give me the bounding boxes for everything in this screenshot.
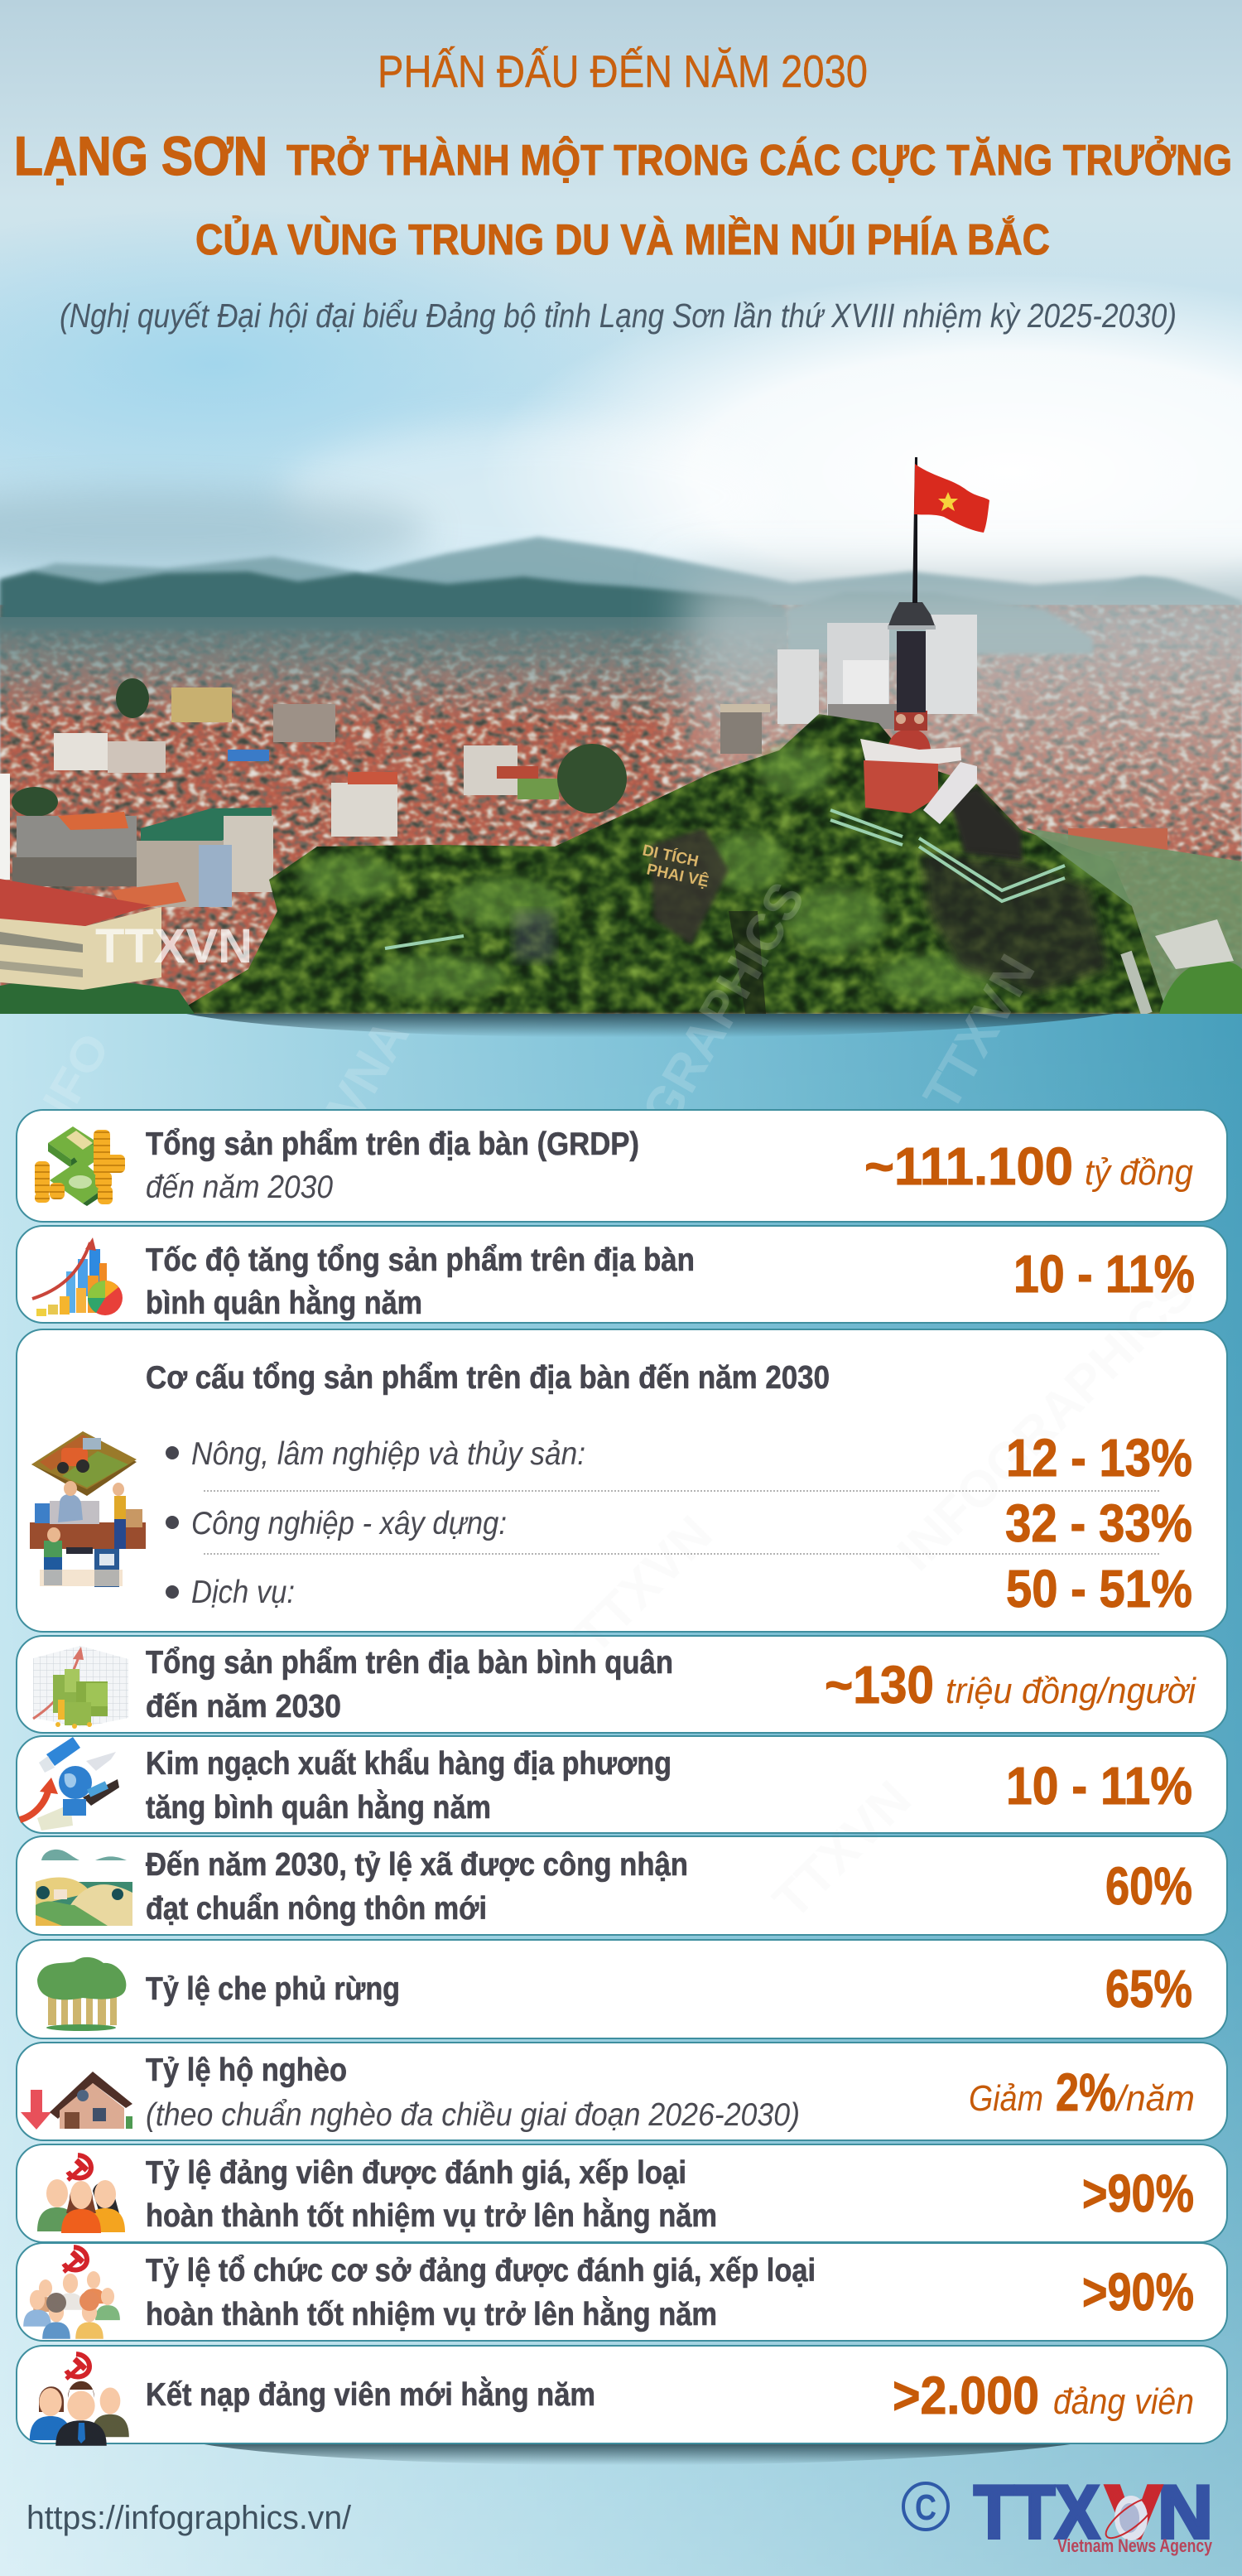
icon: meeting group [23, 2247, 120, 2339]
row: industry: 32 - 33% [1005, 1493, 1192, 1553]
wordmark: TTX [974, 2471, 1100, 2554]
title [14, 46, 1232, 335]
flag [914, 464, 989, 533]
label: (theo chuẩn nghèo đa chiều giai đoạn 2026-2030) [146, 2097, 800, 2133]
label: Tỷ lệ đảng viên được đánh giá, xếp loại [146, 2155, 686, 2191]
value: 2% [1056, 2062, 1116, 2122]
kicker: PHẤN ĐẤU ĐẾN NĂM 2030 [378, 46, 868, 97]
city haze [0, 617, 787, 725]
label: đạt chuẩn nông thôn mới [146, 1891, 487, 1927]
row: agriculture [166, 1428, 1192, 1488]
watermarks: GRAPHICS [631, 873, 816, 1136]
icon: chart with pie [32, 1237, 123, 1316]
panel: export turnover [17, 1736, 1227, 1833]
label: Tổng sản phẩm trên địa bàn (GRDP) [146, 1126, 639, 1162]
value: 65% [1105, 1959, 1192, 2019]
label [146, 1746, 672, 1826]
watermarks over panels: INFOGRAPHICS [887, 1263, 1206, 1582]
value: >90% [1082, 2164, 1194, 2223]
sign on rock: DI TÍCH [641, 841, 700, 871]
panel: GRDP: đến năm 2030 [146, 1170, 333, 1205]
label: Kim ngạch xuất khẩu hàng địa phương [146, 1746, 672, 1782]
icon: green blocks with arrow [33, 1646, 128, 1729]
sign on rock [641, 841, 710, 891]
panel: new rural communes [17, 1836, 1227, 1935]
stairs and railing [385, 810, 1147, 1014]
label: Tổng sản phẩm trên địa bàn bình quân [146, 1645, 673, 1681]
headline: CỦA VÙNG TRUNG DU VÀ MIỀN NÚI PHÍA BẮC [195, 215, 1050, 264]
label: hoàn thành tốt nhiệm vụ trở lên hằng năm [146, 2197, 717, 2234]
icon: farm and industry [30, 1431, 146, 1587]
row: industry [166, 1493, 1192, 1553]
icon: money and coins [35, 1126, 125, 1206]
watermarks over panels: TTXVN [564, 1505, 724, 1665]
value: /năm [1114, 2078, 1195, 2119]
panel: party organizations rating [17, 2243, 1227, 2341]
icon: export logistics [20, 1737, 119, 1831]
globe [1100, 2492, 1160, 2545]
panel: GRDP per capita [17, 1636, 1227, 1733]
label: Tỷ lệ tổ chức cơ sở đảng được đánh giá, xếp loại [146, 2253, 816, 2289]
value: ~111.100 [864, 1136, 1073, 1196]
row: services: 50 - 51% [1006, 1559, 1192, 1618]
heading: Cơ cấu tổng sản phẩm trên địa bàn đến năm 2030 [146, 1360, 830, 1396]
value: 60% [1105, 1856, 1192, 1916]
label [146, 1242, 695, 1321]
copyright mark: C [915, 2487, 936, 2528]
value [969, 2062, 1195, 2122]
watermarks: VNA [316, 1010, 421, 1132]
label: Kết nạp đảng viên mới hằng năm [146, 2376, 595, 2413]
icon: trees [37, 1957, 126, 2031]
label: hoàn thành tốt nhiệm vụ trở lên hằng năm [146, 2296, 717, 2332]
wordmark: V [1105, 2471, 1162, 2554]
panel: GRDP growth [17, 1226, 1227, 1323]
value: ~130 [825, 1655, 934, 1715]
row: agriculture: 12 - 13% [1006, 1428, 1192, 1488]
label: bình quân hằng năm [146, 1285, 422, 1321]
hill with vegetation [174, 714, 1167, 1014]
near ridge [0, 572, 787, 630]
logo: TTXVN [903, 2471, 1213, 2556]
watermarks: INFO [14, 1025, 120, 1156]
value [825, 1655, 1196, 1715]
city texture [0, 605, 1242, 1014]
city buildings [0, 678, 1167, 911]
value [893, 2366, 1194, 2425]
label [146, 2253, 816, 2332]
row: services [166, 1559, 1192, 1618]
icon: poor house with down arrow [21, 2072, 132, 2130]
label: Tốc độ tăng tổng sản phẩm trên địa bàn [146, 1242, 695, 1278]
value: 10 - 11% [1013, 1244, 1195, 1304]
label [146, 2155, 717, 2234]
value: đảng viên [1053, 2381, 1194, 2422]
icon: rural landscape [36, 1850, 132, 1926]
watermarks: TTXVN [912, 945, 1047, 1120]
value: triệu đồng/người [946, 1671, 1196, 1711]
panel: poverty rate [17, 2043, 1227, 2140]
foliage highlights [298, 745, 1122, 1001]
panel: GRDP structure [17, 1329, 1227, 1632]
panel: GRDP [17, 1110, 1227, 1222]
value: >2.000 [893, 2366, 1039, 2425]
row: services: Dịch vụ: [191, 1575, 295, 1610]
value: 10 - 11% [1006, 1756, 1192, 1816]
label [146, 1645, 673, 1725]
label [146, 1847, 688, 1927]
label: Tỷ lệ che phủ rừng [146, 1971, 400, 2007]
row: agriculture: Nông, lâm nghiệp và thủy sản: [191, 1436, 585, 1472]
headline: LẠNG SƠN [14, 125, 267, 186]
label [146, 2053, 800, 2133]
left building with red roof [0, 879, 161, 990]
left tree strip [0, 980, 195, 1014]
icon: party members [37, 2155, 125, 2233]
panel: party members rating [17, 2144, 1227, 2242]
watermark: TTXVN on photo: TTXVN [95, 919, 253, 973]
panel: forest cover [17, 1940, 1227, 2038]
panel: new party members [17, 2346, 1227, 2446]
watermarks [14, 873, 1047, 1156]
flag tower [860, 457, 977, 824]
value: >90% [1082, 2262, 1194, 2322]
icon: three people in suits [30, 2354, 129, 2446]
rock patches [513, 787, 1110, 1014]
label: Đến năm 2030, tỷ lệ xã được công nhận [146, 1847, 688, 1883]
watermarks over panels: TTXVN [763, 1770, 922, 1930]
value [864, 1136, 1193, 1196]
sign on rock: PHAI VỆ [645, 860, 710, 891]
row: industry: Công nghiệp - xây dựng: [191, 1506, 507, 1541]
value: Giảm [969, 2078, 1043, 2119]
label: tăng bình quân hằng năm [146, 1789, 491, 1826]
lower background [0, 1014, 1242, 2576]
wordmark [974, 2471, 1213, 2554]
highrises behind tower [777, 615, 977, 729]
headline [14, 125, 1232, 264]
wordmark: N [1158, 2471, 1213, 2554]
watermarks over panels [564, 1263, 1206, 1930]
label: đến năm 2030 [146, 1689, 341, 1725]
photo: Lạng Sơn city and flag tower [0, 0, 1242, 1014]
value: tỷ đồng [1085, 1152, 1193, 1193]
copyright mark [903, 2483, 948, 2530]
source URL: https://infographics.vn/ [26, 2500, 352, 2536]
right foliage [1027, 828, 1242, 1014]
label: Tỷ lệ hộ nghèo [146, 2053, 347, 2088]
